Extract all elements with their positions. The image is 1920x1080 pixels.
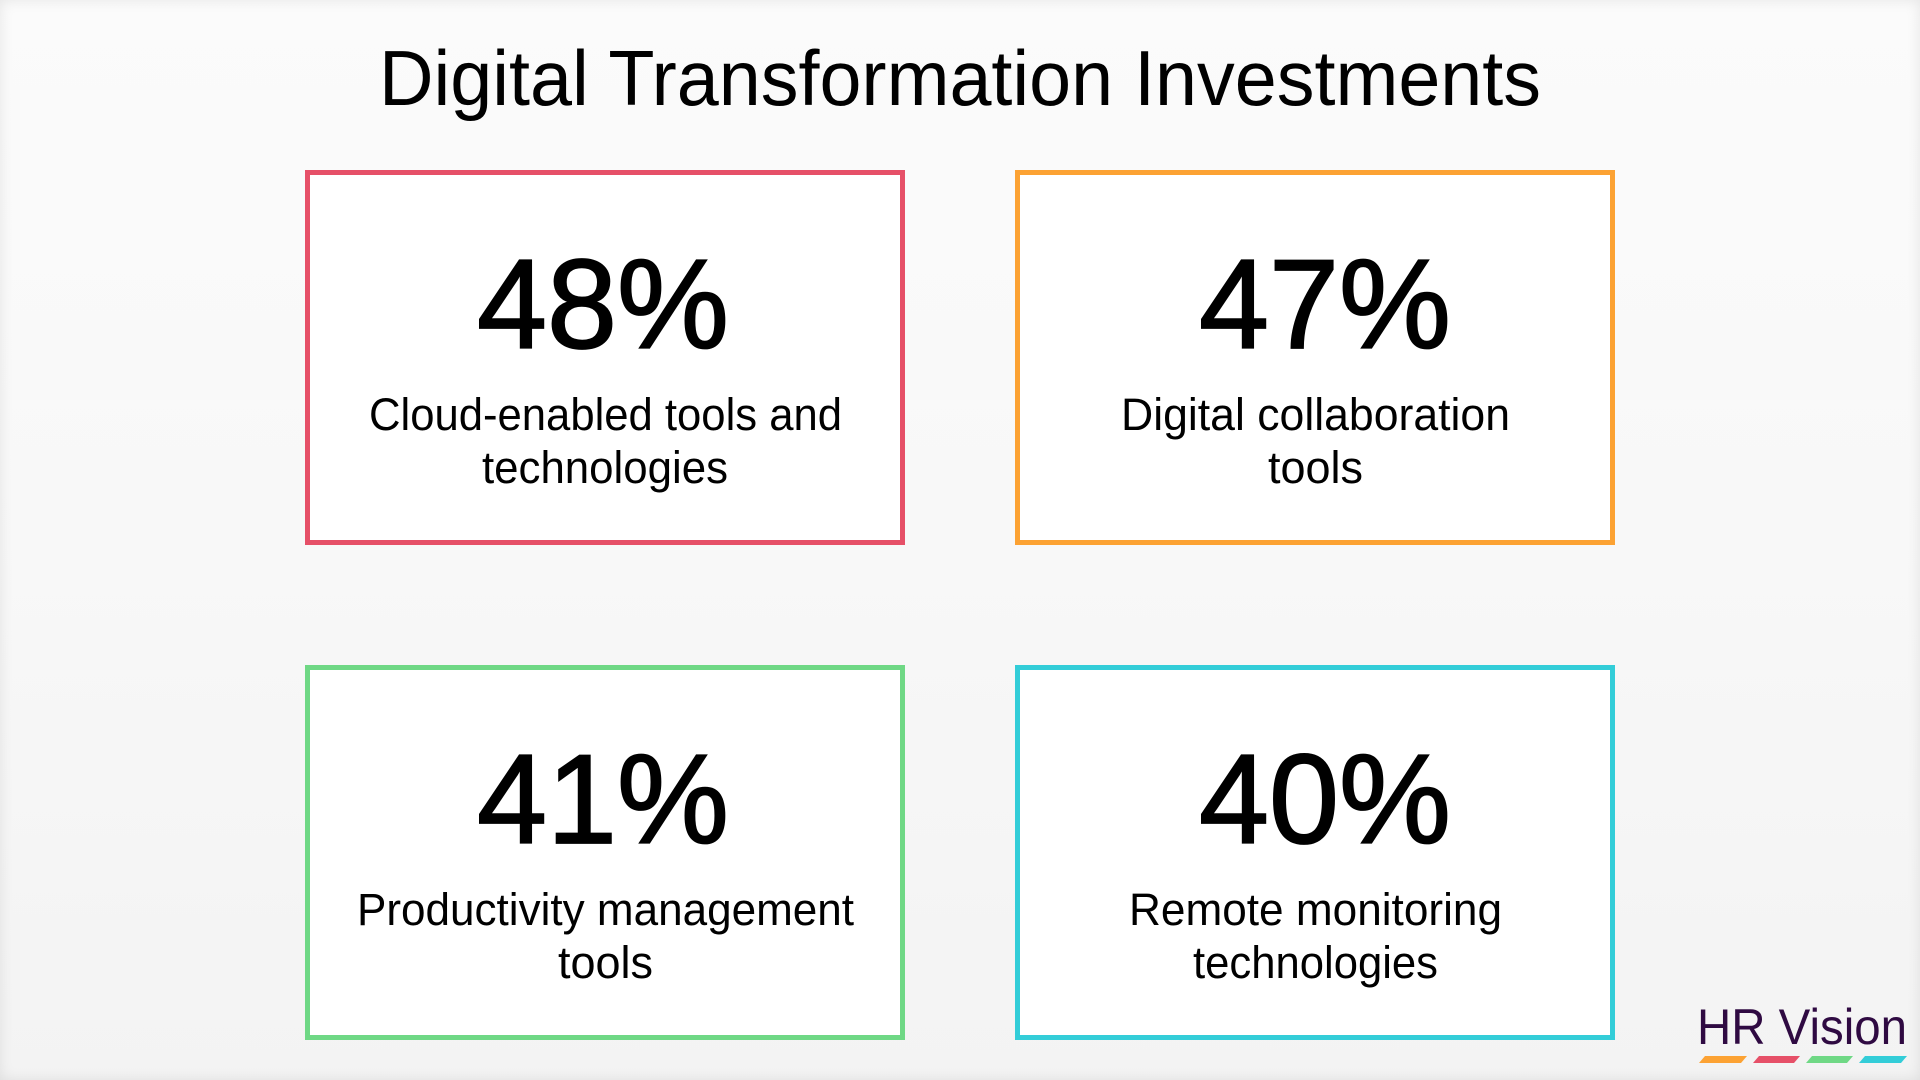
panel border: red [308, 172, 902, 542]
description: digital collaboration [1121, 389, 1510, 493]
description: productivity: tools [558, 937, 653, 988]
logo: HR Vision [1697, 999, 1907, 1063]
logo wordmark: HR Vision [1697, 999, 1907, 1055]
stat: 41%: 41% [477, 728, 729, 870]
panel: productivity management tools [308, 668, 902, 1038]
description: remote monitoring: technologies [1193, 937, 1438, 988]
description: cloud-enabled: Cloud-enabled tools and [369, 389, 842, 440]
panel: digital collaboration tools [1018, 172, 1612, 542]
description: digital collaboration: Digital collaboration [1121, 389, 1510, 440]
description: productivity: Productivity management [357, 884, 854, 935]
panel border: cyan [1018, 668, 1612, 1038]
panel: cloud-enabled tools [308, 172, 902, 542]
panel border: orange [1018, 172, 1612, 542]
logo dashes [1699, 1056, 1907, 1063]
stat: 48%: 48% [477, 233, 729, 375]
stat: 40%: 40% [1199, 728, 1451, 870]
description: cloud-enabled [369, 389, 842, 493]
description: cloud-enabled: technologies [482, 442, 728, 493]
stat: 47%: 47% [1199, 233, 1451, 375]
description: remote monitoring [1129, 884, 1502, 988]
panel: remote monitoring technologies [1018, 668, 1612, 1038]
description: productivity [357, 884, 854, 988]
description: digital collaboration: tools [1268, 442, 1363, 493]
panel border: green [308, 668, 902, 1038]
description: remote monitoring: Remote monitoring [1129, 884, 1502, 935]
title: Digital Transformation Investments [379, 34, 1541, 122]
